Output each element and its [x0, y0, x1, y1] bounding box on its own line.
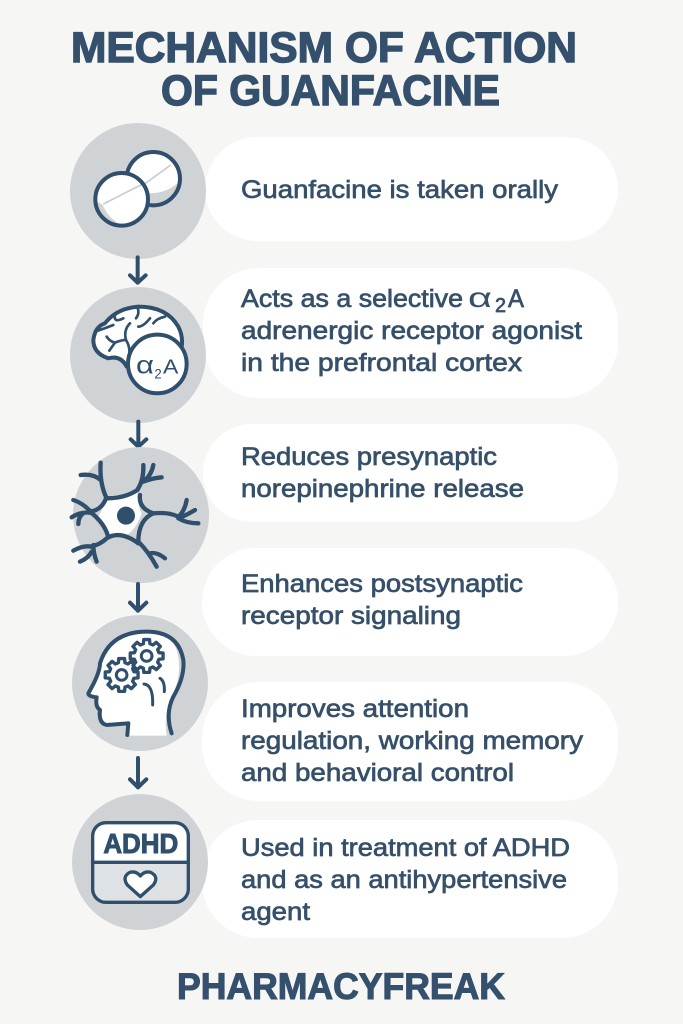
title: MECHANISM OF ACTION: [71, 24, 577, 72]
panel: ADHD treatment: Used in treatment of ADHD: [241, 834, 570, 862]
arrow 3: [130, 584, 146, 611]
icon: head with gears: [72, 615, 208, 751]
icon: ADHD badge with heart: ADHD: [103, 828, 178, 859]
panel: postsynaptic signaling: [202, 548, 618, 656]
panel: reduces release: norepinephrine release: [241, 475, 524, 503]
panel: attention and memory: regulation, working memory: [241, 727, 584, 755]
arrow 4: [130, 758, 146, 787]
panel: ADHD treatment: [202, 820, 618, 938]
panel: postsynaptic signaling: receptor signaling: [241, 602, 461, 630]
panel: taken orally: Guanfacine is taken orally: [241, 176, 559, 204]
panel: reduces release: [203, 424, 618, 522]
icon: neuron: [72, 447, 209, 583]
arrow 1: [130, 257, 146, 283]
panel: attention and memory: and behavioral control: [241, 759, 514, 787]
panel: ADHD treatment: agent: [241, 898, 310, 926]
panel: receptor agonist: in the prefrontal cortex: [241, 349, 523, 377]
panel: receptor agonist: 2: [495, 295, 506, 317]
icon: brain with alpha-2A: 2: [154, 365, 162, 381]
title: [71, 24, 577, 115]
panel: reduces release: Reduces presynaptic: [241, 443, 497, 471]
footer brand: PHARMACYFREAK: [177, 966, 505, 1007]
panel: attention and memory: Improves attention: [241, 695, 469, 723]
icon: tablets: [70, 123, 206, 259]
panel: receptor agonist: α: [468, 282, 492, 313]
icon: brain with alpha-2A: α: [136, 352, 154, 379]
icon: brain with alpha-2A: [70, 287, 206, 423]
panel: receptor agonist: Acts as a selective: [241, 285, 463, 313]
title: OF GUANFACINE: [161, 67, 500, 115]
icon: brain with alpha-2A: A: [163, 355, 179, 378]
panel: postsynaptic signaling: Enhances postsynaptic: [241, 570, 523, 598]
panel: ADHD treatment: and as an antihypertensive: [241, 866, 567, 894]
panel: attention and memory: [202, 682, 618, 801]
panel: receptor agonist: A: [508, 285, 524, 313]
icon: ADHD badge with heart: [72, 794, 208, 930]
panel: receptor agonist: [203, 268, 618, 398]
panel: taken orally: [205, 137, 618, 241]
panel: receptor agonist: adrenergic receptor agonist: [241, 317, 582, 345]
arrow 2: [131, 422, 146, 447]
